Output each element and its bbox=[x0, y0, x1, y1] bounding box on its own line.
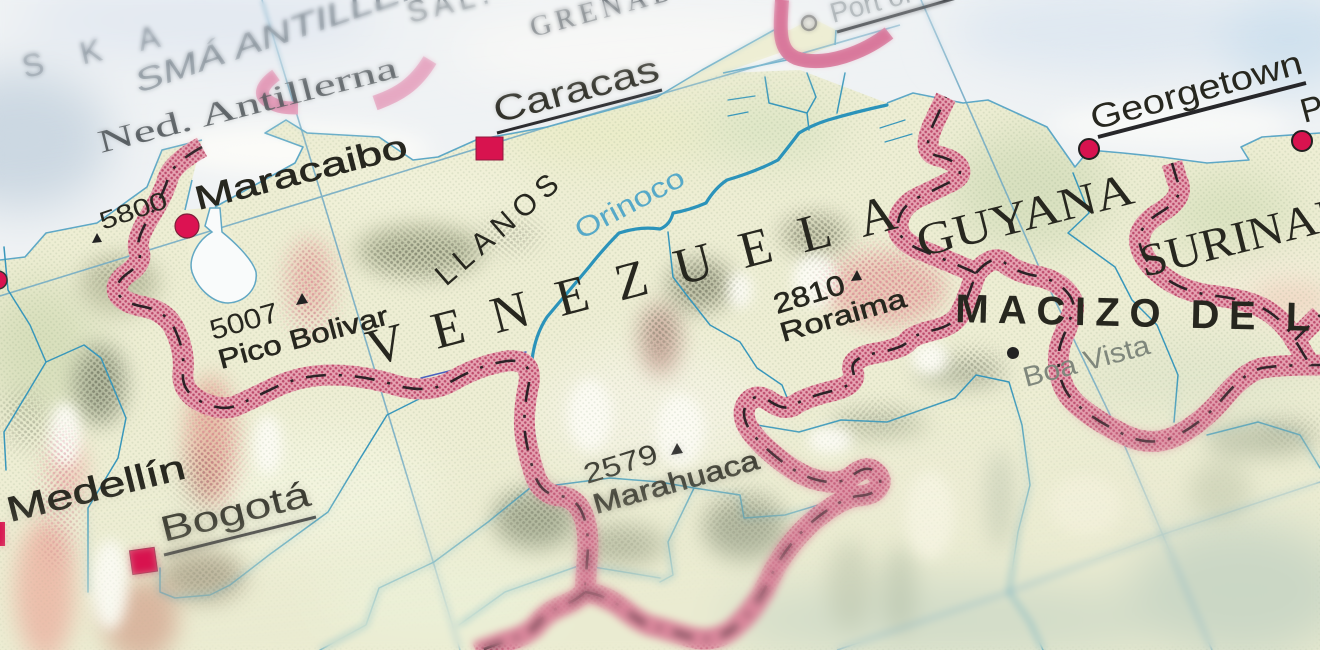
label: Ned. Antillerna: Ned. Antillerna bbox=[94, 49, 401, 160]
city: Georgetown bbox=[1079, 44, 1306, 159]
river: Caura bbox=[668, 232, 790, 405]
city: Caracas bbox=[476, 48, 663, 160]
peak: Pico Bolivar bbox=[206, 293, 392, 375]
peak: Marahuaca: Marahuaca bbox=[589, 444, 763, 520]
border: Venezuela and Brazil bbox=[585, 273, 976, 639]
city: Bogotá bbox=[129, 473, 316, 575]
terrain: white highlights bbox=[49, 403, 81, 467]
label: S K A: SKA bbox=[18, 10, 200, 85]
peak: 5800 bbox=[92, 186, 171, 243]
peak: 5800: 5800 bbox=[96, 186, 171, 236]
terrain: grey relief bbox=[355, 224, 485, 276]
city: Maracaibo bbox=[175, 127, 411, 238]
peak: Pico Bolivar: Pico Bolivar bbox=[215, 301, 392, 375]
peak: Roraima: 2810 bbox=[770, 269, 849, 320]
border: Guyana and Suriname bbox=[1139, 163, 1320, 365]
city: Georgetown: Georgetown bbox=[1086, 44, 1306, 138]
country borders bbox=[117, 97, 1320, 650]
terrain: peach lowlands bbox=[15, 520, 75, 650]
city: Paramaribo bbox=[1292, 88, 1320, 151]
peak: Roraima: Roraima bbox=[776, 283, 911, 348]
city: Caracas: Caracas bbox=[489, 48, 663, 131]
peak: Marahuaca bbox=[580, 438, 763, 520]
peak: Roraima bbox=[770, 269, 911, 348]
coastline bbox=[0, 30, 1320, 260]
border: Guyana and Brazil bbox=[976, 260, 1320, 442]
border: Colombia and Brazil bbox=[476, 592, 585, 650]
label: Orinoco: Orinoco bbox=[569, 162, 690, 245]
maritime boundaries bbox=[262, 0, 889, 108]
city: Medellín bbox=[0, 448, 189, 546]
lake Maracaibo bbox=[191, 208, 256, 303]
label: GUYANA: GUYANA bbox=[911, 163, 1139, 267]
label: Boa Vista: Boa Vista bbox=[1020, 329, 1154, 393]
city: Maracaibo: Maracaibo bbox=[191, 127, 411, 217]
city: western edge marker bbox=[0, 271, 7, 289]
peak: Marahuaca: 2579 bbox=[580, 438, 661, 490]
city: Bogotá: Bogotá bbox=[156, 473, 316, 550]
label: LLANOS: LLANOS bbox=[429, 168, 565, 292]
city: Medellín: Medellín bbox=[3, 448, 189, 530]
label: MACIZO DE L: MACIZO DE L bbox=[955, 287, 1311, 340]
label: VENEZUELA: VENEZUELA bbox=[361, 184, 903, 378]
river: Orinoco bbox=[531, 105, 887, 490]
border: Venezuela and Guyana bbox=[898, 97, 976, 273]
peak: Pico Bolivar: 5007 bbox=[206, 297, 282, 346]
border: Colombia and Venezuela bbox=[117, 147, 588, 592]
